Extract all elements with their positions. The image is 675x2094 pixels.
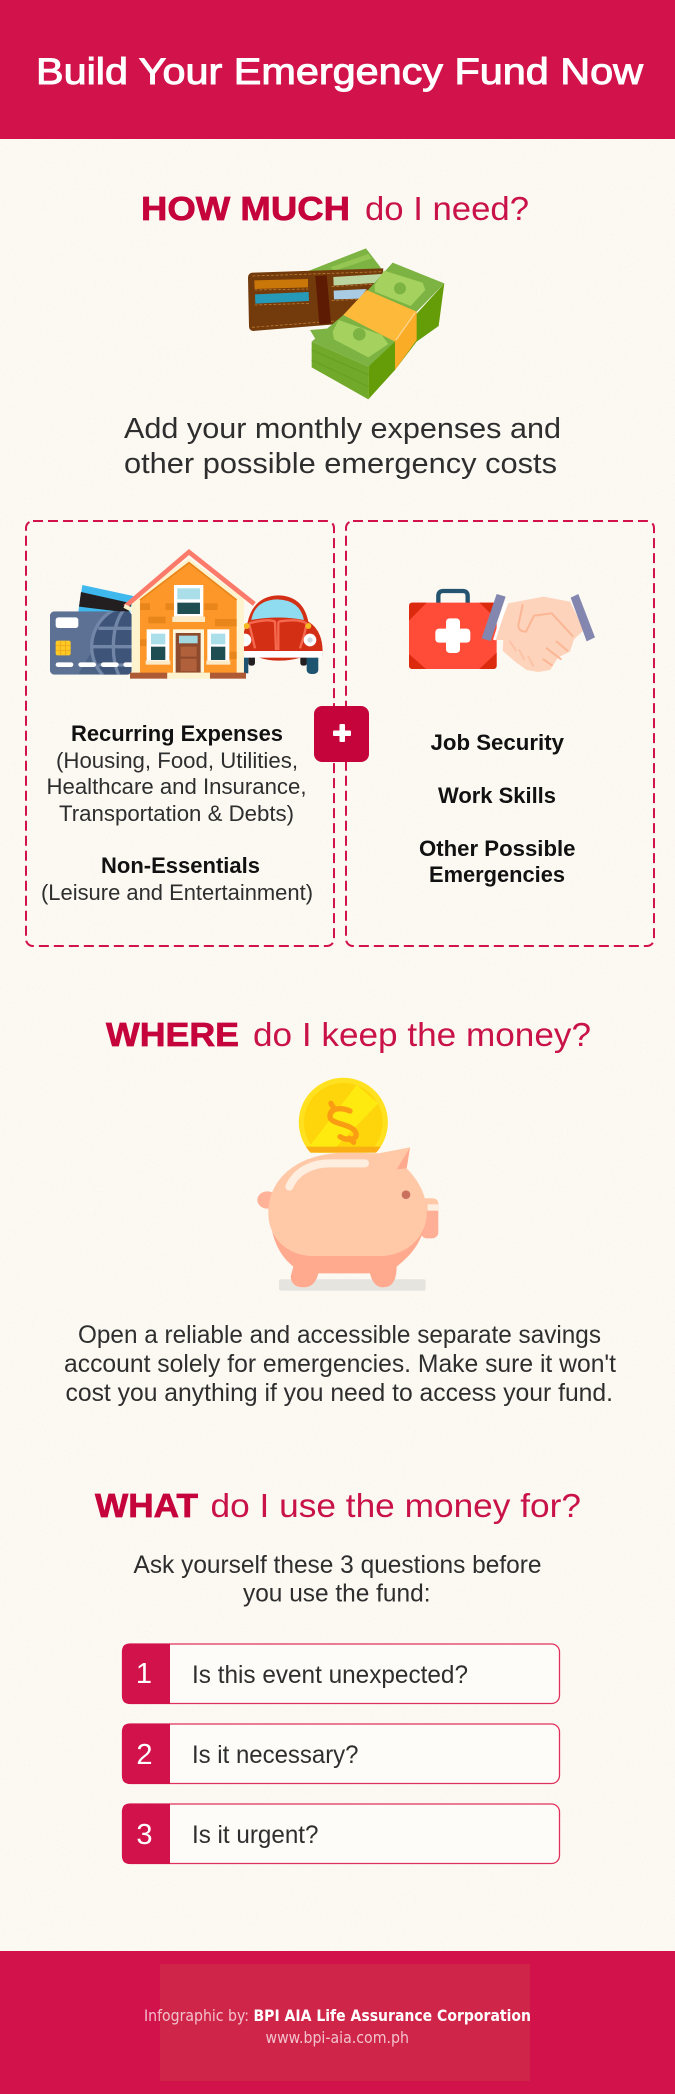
footer xyxy=(0,1951,675,2094)
question 1: 1 xyxy=(136,1658,152,1690)
icon: first aid kit and handshake xyxy=(409,591,595,672)
non-essentials text xyxy=(41,853,313,905)
question 3: Is it urgent? xyxy=(192,1821,318,1849)
recurring expenses text xyxy=(46,721,306,826)
footer credit: Infographic by: xyxy=(144,2006,249,2025)
non-essentials text: (Leisure and Entertainment) xyxy=(41,880,313,905)
question 1: Is this event unexpected? xyxy=(192,1661,468,1689)
what intro text: Ask yourself these 3 questions before xyxy=(134,1551,542,1579)
where body text: cost you anything if you need to access your fund. xyxy=(66,1379,613,1407)
heading: what: do I use the money for? xyxy=(210,1487,581,1524)
heading: how much xyxy=(141,190,529,227)
intro text: other possible emergency costs xyxy=(124,448,557,480)
panel: other emergencies xyxy=(346,521,654,946)
title: Build Your Emergency Fund Now xyxy=(36,50,644,92)
heading: where: do I keep the money? xyxy=(253,1016,591,1053)
what intro text xyxy=(134,1551,542,1608)
heading: how much: HOW MUCH xyxy=(141,190,350,227)
what intro text: you use the fund: xyxy=(243,1580,430,1608)
footer url: www.bpi-aia.com.ph xyxy=(266,2028,409,2047)
panel: recurring expenses xyxy=(26,521,334,946)
other possible emergencies: Other Possible xyxy=(419,836,576,861)
heading: how much: do I need? xyxy=(365,190,529,227)
question 1 xyxy=(122,1644,560,1704)
question 3: 3 xyxy=(136,1819,153,1851)
icon: card, house and car xyxy=(50,552,323,688)
recurring expenses text: (Housing, Food, Utilities, xyxy=(56,748,298,773)
heading: where xyxy=(106,1016,591,1053)
where body text: account solely for emergencies. Make sure it won't xyxy=(64,1350,616,1378)
heading: where: WHERE xyxy=(106,1016,239,1053)
recurring expenses text: Transportation & Debts) xyxy=(59,801,294,826)
where body text: Open a reliable and accessible separate savings xyxy=(78,1321,601,1349)
footer credit xyxy=(144,2006,531,2025)
other possible emergencies: Emergencies xyxy=(429,862,565,887)
question 3 xyxy=(122,1804,560,1864)
work skills: Work Skills xyxy=(438,783,556,808)
plus badge xyxy=(314,706,369,762)
heading: what: WHAT xyxy=(95,1487,198,1524)
icon: wallet and money xyxy=(248,248,444,399)
recurring expenses text: Recurring Expenses xyxy=(71,721,283,746)
footer credit: BPI AIA Life Assurance Corporation xyxy=(254,2006,531,2025)
question 2: Is it necessary? xyxy=(192,1741,358,1769)
non-essentials text: Non-Essentials xyxy=(101,853,260,878)
where body text xyxy=(64,1321,616,1407)
question 2 xyxy=(122,1724,560,1784)
header band xyxy=(0,0,675,139)
intro text xyxy=(124,413,561,480)
panel: how much xyxy=(124,190,561,480)
panel: where xyxy=(64,1016,616,1407)
intro text: Add your monthly expenses and xyxy=(124,413,561,445)
question 2: 2 xyxy=(136,1739,153,1771)
other possible emergencies xyxy=(419,836,576,887)
icon: piggy bank with coin xyxy=(257,1078,438,1291)
panel: what xyxy=(95,1487,581,1864)
recurring expenses text: Healthcare and Insurance, xyxy=(46,774,306,799)
job security: Job Security xyxy=(430,730,565,755)
